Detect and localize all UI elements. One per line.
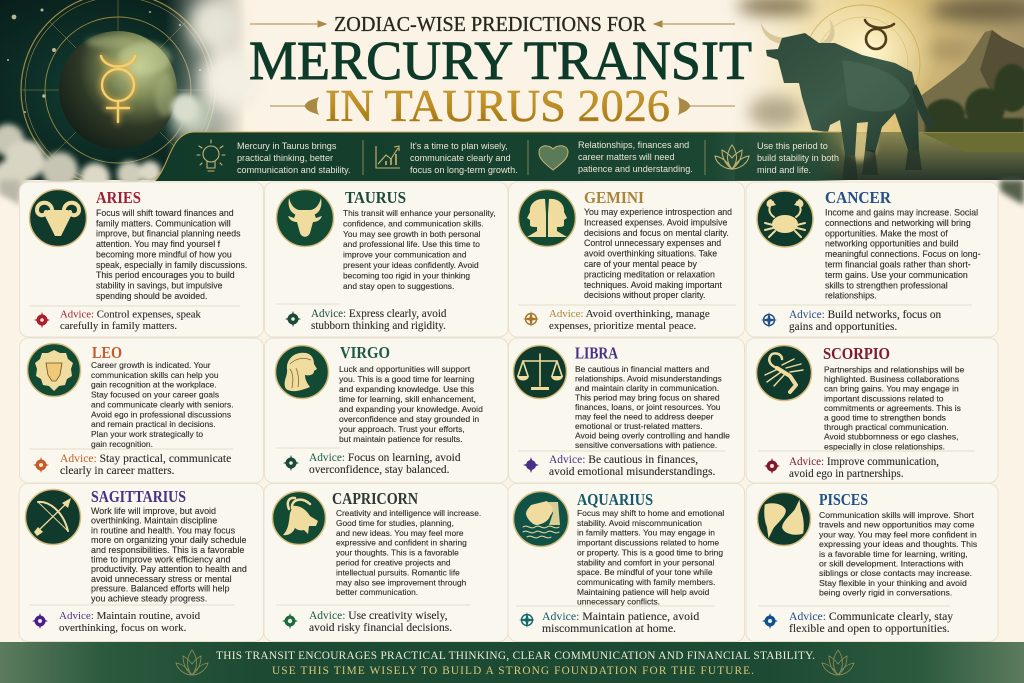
icon: scorpion bbox=[756, 346, 812, 400]
advice text: gains and opportunities. bbox=[789, 321, 897, 333]
band text 2: It's a time to plan wisely, bbox=[410, 141, 508, 151]
footer banner bbox=[0, 642, 1024, 683]
advice icon bbox=[764, 458, 780, 474]
body text: Be cautious in financial matters and bbox=[575, 364, 709, 374]
body text: space. Be mindful of your tone while bbox=[577, 567, 713, 577]
body text: You may see growth in both personal bbox=[343, 229, 481, 239]
body text: being overly rigid in conversations. bbox=[819, 588, 952, 598]
body text: Income and gains may increase. Social bbox=[825, 208, 978, 218]
icon: footer lotus left bbox=[176, 650, 208, 675]
body text: you achieve steady progress. bbox=[91, 593, 207, 603]
advice text: avoid ego in partnerships. bbox=[789, 468, 904, 480]
body text: skills to strengthen professional bbox=[825, 280, 948, 290]
body text: This period encourages you to build bbox=[96, 270, 235, 280]
title: AQUARIUS bbox=[577, 490, 653, 509]
body text: important discussions related to bbox=[824, 393, 944, 403]
title: PISCES bbox=[819, 490, 868, 509]
body text: through practical communication. bbox=[824, 422, 949, 432]
advice icon bbox=[519, 612, 535, 628]
body text: improve, but financial planning needs bbox=[96, 229, 241, 239]
advice text: expenses, prioritize mental peace. bbox=[549, 320, 696, 332]
body text: avoid overthinking situations. Take bbox=[584, 249, 717, 259]
icon: water bearer bbox=[514, 492, 568, 546]
icon: bull bbox=[276, 190, 334, 246]
body text: Plan your work strategically to bbox=[91, 429, 203, 439]
card: Leo bbox=[20, 338, 264, 483]
footer line 1: THIS TRANSIT ENCOURAGES PRACTICAL THINKING, CLEAR COMMUNICATION AND FINANCIAL STABILITY. bbox=[216, 650, 815, 662]
body text: your thoughts. This is a favorable bbox=[336, 548, 459, 558]
body text: expressing your ideas and thoughts. This bbox=[819, 539, 978, 549]
advice icon bbox=[523, 311, 539, 327]
body text: Luck and opportunities will support bbox=[339, 364, 471, 374]
card: Pisces bbox=[746, 484, 998, 642]
body text: This period may bring focus on shared bbox=[575, 392, 720, 402]
advice icon bbox=[523, 457, 539, 473]
title: VIRGO bbox=[340, 343, 390, 362]
body text: Creativity and intelligence will increase. bbox=[336, 508, 481, 518]
card: Aries bbox=[20, 182, 264, 337]
body text: confidence, and communication skills. bbox=[343, 218, 484, 228]
advice text: Advice: Build networks, focus on bbox=[789, 309, 941, 321]
advice text: Advice: Avoid overthinking, manage bbox=[549, 308, 710, 320]
body text: your approach. Trust your efforts, bbox=[339, 424, 465, 434]
body text: important discussions related to home bbox=[577, 538, 719, 548]
body text: communication skills can help you bbox=[91, 370, 219, 380]
advice text: miscommunication at home. bbox=[542, 621, 676, 635]
body text: decisions and focus on mental clarity. bbox=[584, 228, 729, 238]
card: Scorpio bbox=[746, 338, 998, 483]
card: Gemini bbox=[508, 182, 744, 337]
band text 4: Use this period to bbox=[757, 141, 828, 151]
title: CANCER bbox=[825, 188, 892, 207]
advice text: Advice: Use creativity wisely, bbox=[309, 610, 448, 622]
icon: growth chart bbox=[376, 146, 400, 168]
icon: ram bbox=[30, 190, 86, 246]
body text: term financial goals rather than short- bbox=[825, 260, 971, 270]
advice text: avoid risky financial decisions. bbox=[309, 622, 452, 634]
card: Taurus bbox=[264, 182, 508, 337]
card: Cancer bbox=[746, 182, 998, 337]
title: GEMINI bbox=[584, 188, 644, 207]
body text: attention. You may find yoursel f bbox=[96, 239, 221, 249]
advice text: Advice: Maintain patience, avoid bbox=[542, 609, 699, 623]
body text: intellectual pursuits. Romantic life bbox=[336, 567, 460, 577]
body text: and communicate clearly with seniors. bbox=[91, 399, 234, 409]
advice text: clearly in career matters. bbox=[60, 464, 175, 477]
body text: Communication skills will improve. Short bbox=[819, 510, 975, 520]
body text: may also see improvement through bbox=[336, 577, 467, 587]
body text: spending should be avoided. bbox=[96, 291, 207, 301]
body text: Focus may shift to home and emotional bbox=[577, 508, 724, 518]
band text 1: practical thinking, better bbox=[237, 153, 333, 163]
body text: avoid unnecessary stress or mental bbox=[91, 574, 232, 584]
subtitle line: ZODIAC-WISE PREDICTIONS FOR bbox=[334, 12, 646, 36]
body text: Control unnecessary expenses and bbox=[584, 238, 721, 248]
body text: time to improve work efficiency and bbox=[91, 554, 230, 564]
advice text: Advice: Express clearly, avoid bbox=[311, 308, 446, 320]
band text 2: focus on long-term growth. bbox=[410, 165, 518, 175]
body text: present your ideas confidently. Avoid bbox=[343, 260, 479, 270]
body text: term gains. Use your communication bbox=[825, 270, 968, 280]
title: SAGITTARIUS bbox=[91, 487, 186, 506]
header title block bbox=[249, 12, 752, 131]
card: Capricorn bbox=[264, 484, 508, 642]
icon: maiden bbox=[276, 346, 328, 398]
body text: stability and comfort in your personal bbox=[577, 557, 715, 567]
title: CAPRICORN bbox=[332, 489, 418, 508]
body text: your way. You may feel more confident in bbox=[819, 529, 977, 539]
body text: but maintain patience for results. bbox=[339, 434, 463, 444]
header illustration: cosmic scene with Mercury planet bbox=[0, 0, 260, 196]
body text: more on organizing your daily schedule bbox=[91, 535, 247, 545]
body text: finances, loans, or joint resources. You bbox=[575, 402, 721, 412]
band text 4: mind and life. bbox=[757, 165, 811, 175]
body text: relationships. bbox=[825, 291, 877, 301]
icon: light bulb bbox=[197, 140, 225, 171]
body text: practicing meditation or relaxation bbox=[584, 269, 715, 279]
body text: becoming more mindful of how you bbox=[96, 249, 232, 259]
icon: lotus bbox=[715, 145, 749, 169]
body text: decisions without proper clarity. bbox=[584, 290, 705, 300]
advice text: Advice: Focus on learning, avoid bbox=[309, 452, 461, 464]
advice text: overthinking, focus on work. bbox=[59, 622, 187, 634]
body text: This transit will enhance your personality, bbox=[343, 208, 496, 218]
icon: footer lotus right bbox=[822, 650, 854, 675]
card: Sagittarius bbox=[19, 484, 264, 642]
band text 2: communicate clearly and bbox=[410, 153, 511, 163]
body text: and maintain clarity in communication. bbox=[575, 383, 719, 393]
card: Virgo bbox=[264, 338, 508, 483]
advice text: stubborn thinking and rigidity. bbox=[311, 320, 446, 332]
body text: and responsibilities. This is a favorable bbox=[91, 545, 244, 555]
main title: MERCURY TRANSIT bbox=[249, 30, 752, 91]
body text: may feel the need to address deeper bbox=[575, 412, 714, 422]
advice icon bbox=[285, 311, 301, 327]
body text: a good time to strengthen bonds bbox=[824, 412, 946, 422]
advice icon bbox=[34, 312, 50, 328]
advice icon bbox=[282, 613, 298, 629]
advice icon bbox=[283, 455, 299, 471]
body text: improve your communication and bbox=[343, 250, 467, 260]
body text: techniques. Avoid making important bbox=[584, 280, 723, 290]
icon: bow and arrow bbox=[26, 490, 80, 544]
body text: becoming too rigid in your thinking bbox=[343, 270, 470, 280]
title: LEO bbox=[92, 343, 122, 362]
body text: in family matters. You may engage in bbox=[577, 528, 715, 538]
body text: Stay flexible in your thinking and avoid bbox=[819, 578, 967, 588]
intro band bbox=[155, 132, 850, 181]
body text: travels and new opportunitios may come bbox=[819, 520, 975, 530]
body text: Focus will shift toward finances and bbox=[96, 208, 234, 218]
card: Aquarius bbox=[508, 484, 744, 642]
body text: and new ideas. You may feel more bbox=[336, 528, 464, 538]
footer line 2: USE THIS TIME WISELY TO BUILD A STRONG FOUNDATION FOR THE FUTURE. bbox=[272, 665, 754, 677]
icon: scales bbox=[514, 346, 566, 398]
body text: expressive and confident in sharing bbox=[336, 538, 467, 548]
body text: opportunities. Make the most of bbox=[825, 228, 948, 238]
advice icon bbox=[761, 312, 777, 328]
side background texture bbox=[0, 180, 1024, 205]
icon: heart bbox=[539, 146, 568, 170]
card: Libra bbox=[508, 338, 744, 483]
body text: and expanding your knowledge. Avoid bbox=[339, 404, 483, 414]
band text 3: Relationships, finances and bbox=[578, 140, 689, 150]
body text: Work life will improve, but avoid bbox=[91, 506, 216, 516]
icon: lion bbox=[28, 344, 80, 396]
title: TAURUS bbox=[345, 188, 406, 207]
body text: unnecessary conflicts. bbox=[577, 597, 660, 607]
body text: Career growth is indicated. Your bbox=[91, 360, 211, 370]
body text: Stay focused on your career goals bbox=[91, 390, 219, 400]
body text: connections and networking will bring bbox=[825, 218, 971, 228]
body text: or skill development. Interactions with bbox=[819, 558, 964, 568]
header illustration: bull in landscape bbox=[725, 0, 1024, 180]
icon: crab bbox=[757, 191, 813, 247]
body text: productivity. Pay attention to health and bbox=[91, 564, 247, 574]
advice text: overconfidence, stay balanced. bbox=[309, 464, 450, 476]
body text: emotional or trust-related matters. bbox=[575, 421, 703, 431]
advice text: Advice: Improve communication, bbox=[789, 456, 939, 468]
body text: Avoid stubbornness or ego clashes, bbox=[824, 432, 959, 442]
advice text: carefully in family matters. bbox=[60, 320, 177, 332]
body text: Increased expenses. Avoid impulsive bbox=[584, 217, 727, 227]
body text: Partnerships and relationships will be bbox=[824, 364, 965, 374]
body text: care of your mental peace by bbox=[584, 259, 697, 269]
band text 3: career matters will need bbox=[578, 152, 675, 162]
body text: relationships. Avoid misunderstandings bbox=[575, 374, 722, 384]
body text: commitments or agreements. This is bbox=[824, 403, 961, 413]
body text: especially in close relationships. bbox=[824, 441, 945, 451]
body text: Good time for studies, planning, bbox=[336, 518, 454, 528]
body text: overthinking. Maintain discipline bbox=[91, 516, 217, 526]
icon: twins bbox=[518, 190, 576, 246]
body text: overconfidence and stay grounded in bbox=[339, 414, 479, 424]
body text: stability in savings, but impulsive bbox=[96, 280, 223, 290]
body text: speak, especially in family discussions. bbox=[96, 260, 247, 270]
icon: goat bbox=[272, 492, 326, 544]
advice text: avoid emotional misunderstandings. bbox=[549, 466, 716, 478]
body text: and remain practical in decisions. bbox=[91, 419, 216, 429]
secondary title: IN TAURUS 2026 bbox=[325, 81, 670, 131]
body text: you. This is a good time for learning bbox=[339, 374, 474, 384]
body text: siblings or close contacts may increase. bbox=[819, 568, 972, 578]
body text: and stay open to suggestions. bbox=[343, 281, 454, 291]
body text: stability. Avoid miscommunication bbox=[577, 518, 702, 528]
body text: Avoid being overly controlling and handle bbox=[575, 430, 730, 440]
body text: sensitive conversations with patience. bbox=[575, 440, 717, 450]
advice text: Advice: Control expenses, speak bbox=[60, 308, 201, 320]
body text: and professional life. Use this time to bbox=[343, 239, 480, 249]
advice text: Advice: Stay practical, communicate bbox=[60, 452, 231, 465]
body text: gain recognition. bbox=[91, 439, 153, 449]
advice text: Advice: Communicate clearly, stay bbox=[789, 610, 953, 623]
advice icon bbox=[33, 457, 49, 473]
body text: family matters. Communication will bbox=[96, 218, 231, 228]
advice text: Advice: Maintain routine, avoid bbox=[59, 610, 200, 622]
body text: pressure. Balanced efforts will help bbox=[91, 584, 229, 594]
advice icon bbox=[32, 613, 48, 629]
title: LIBRA bbox=[575, 344, 618, 362]
body text: gain recognition at the workplace. bbox=[91, 380, 217, 390]
body text: Avoid ego in professional discussions bbox=[91, 409, 231, 419]
band text 3: patience and understanding. bbox=[578, 164, 693, 174]
advice icon bbox=[762, 613, 778, 629]
body text: better communication. bbox=[336, 587, 418, 597]
body text: You may experience introspection and bbox=[584, 207, 732, 217]
body text: can bring gains. You may engage in bbox=[824, 384, 959, 394]
body text: or property. This is a good time to bring bbox=[577, 547, 723, 557]
advice text: flexible and open to opportunities. bbox=[789, 622, 950, 635]
body text: in routine and health. You may focus bbox=[91, 525, 236, 535]
title: SCORPIO bbox=[823, 344, 890, 363]
advice text: Advice: Be cautious in finances, bbox=[549, 454, 698, 466]
body text: meaningful connections. Focus on long- bbox=[825, 249, 981, 259]
body text: Maintaining patience will help avoid bbox=[577, 587, 710, 597]
body text: highlighted. Business collaborations bbox=[824, 374, 959, 384]
band text 1: communication and stability. bbox=[237, 165, 351, 175]
band text 4: build stability in both bbox=[757, 153, 839, 163]
body text: time for learning, skill enhancement, bbox=[339, 394, 476, 404]
band text 1: Mercury in Taurus brings bbox=[237, 141, 337, 151]
title: ARIES bbox=[96, 188, 141, 207]
body text: networking opportunities and build bbox=[825, 239, 959, 249]
body text: and expanding knowledge. Use this bbox=[339, 384, 474, 394]
body text: communicating with family members. bbox=[577, 577, 715, 587]
icon: fish bbox=[758, 492, 810, 546]
body text: is a favorable time for learning, writing, bbox=[819, 549, 968, 559]
body text: period for creative projects and bbox=[336, 558, 451, 568]
